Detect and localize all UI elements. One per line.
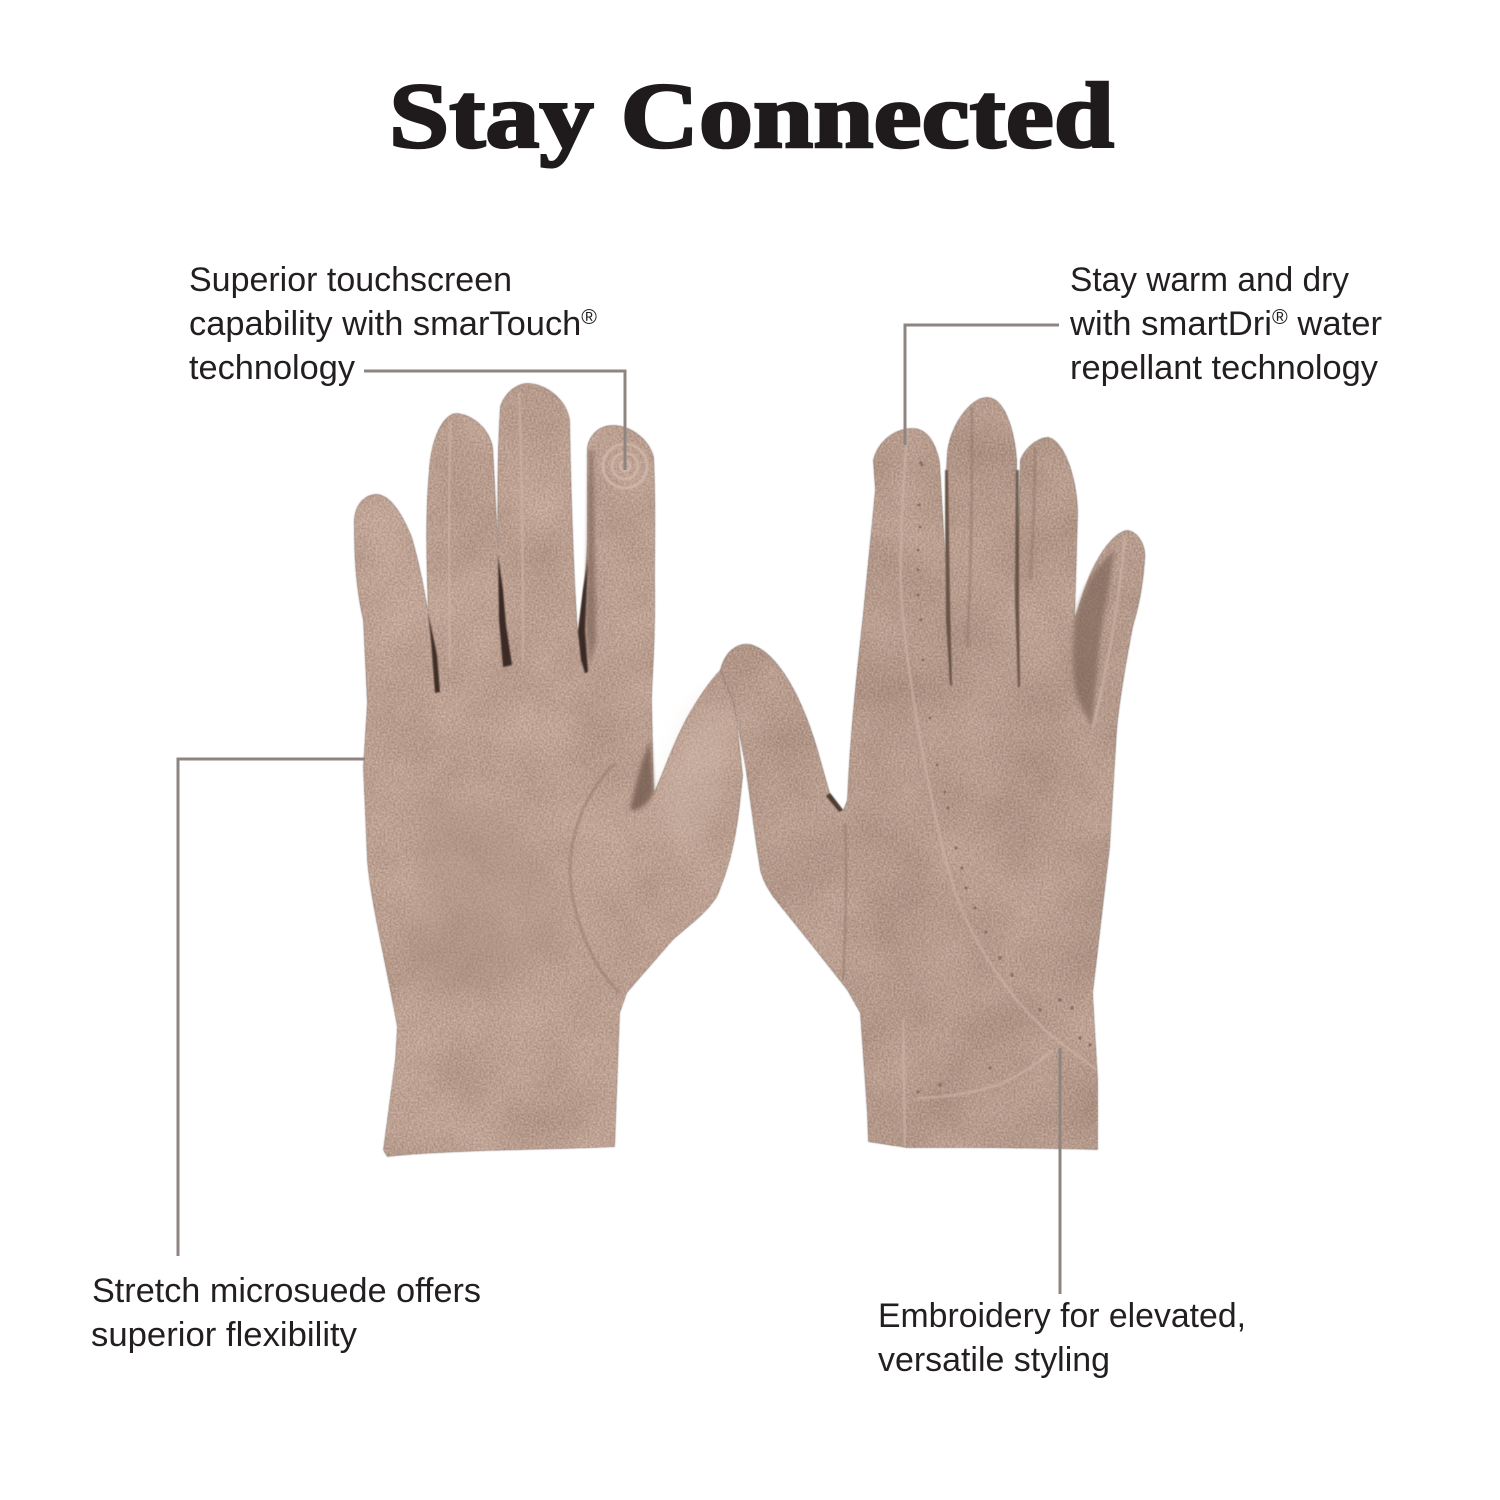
- callout text: touchscreen: [189, 261, 598, 387]
- left glove: palm with touchscreen fingertip: [354, 383, 743, 1157]
- right glove: back with embroidery: [720, 397, 1145, 1150]
- thumb patch highlight: [655, 690, 733, 850]
- callout text: stretch microsuede: Stretch microsuede offers: [92, 1272, 481, 1310]
- callout text: water repellant: Stay warm and dry: [1070, 261, 1349, 299]
- leader line: embroidery: [1058, 1048, 1062, 1294]
- callout text: touchscreen: capability with smarTouch: [189, 305, 576, 343]
- callout: embroidery: [878, 1048, 1246, 1379]
- finger slits: [826, 470, 1115, 812]
- callout text: water repellant: ®: [1272, 306, 1288, 329]
- callout: water repellant: [905, 261, 1382, 445]
- leader line: touchscreen: [364, 371, 625, 470]
- callout text: touchscreen: Superior touchscreen: [189, 261, 512, 299]
- title: Stay Connected: [389, 65, 1114, 168]
- callout: stretch microsuede: [91, 759, 481, 1354]
- touchscreen fingertip spiral: [603, 444, 647, 488]
- embroidery perforations: [916, 461, 1092, 1094]
- palm and cuff shading: [410, 796, 560, 990]
- callout text: touchscreen: ®: [581, 306, 598, 329]
- callout text: embroidery: Embroidery for elevated,: [878, 1297, 1246, 1335]
- callout text: water repellant: with smartDri: [1070, 305, 1268, 343]
- callout text: water repellant: [1069, 261, 1382, 387]
- callout: touchscreen: [189, 261, 625, 470]
- finger and thumb seams: [449, 392, 620, 993]
- leader line: water repellant: [905, 325, 1059, 445]
- callout text: stretch microsuede: [91, 1272, 481, 1354]
- callout text: touchscreen: technology: [189, 349, 355, 387]
- glove body: left: [354, 383, 743, 1157]
- callout text: stretch microsuede: superior flexibility: [91, 1316, 357, 1354]
- seams: [843, 407, 1125, 1147]
- callout text: water repellant: repellant technology: [1070, 349, 1378, 387]
- callout text: embroidery: versatile styling: [878, 1341, 1110, 1379]
- glove body: right: [720, 397, 1145, 1150]
- thumb crotch shadow: [630, 740, 654, 810]
- callout text: embroidery: [878, 1297, 1246, 1379]
- leader line: stretch microsuede: [178, 759, 365, 1256]
- callout text: water repellant: water: [1288, 305, 1382, 343]
- finger slits: [428, 450, 596, 693]
